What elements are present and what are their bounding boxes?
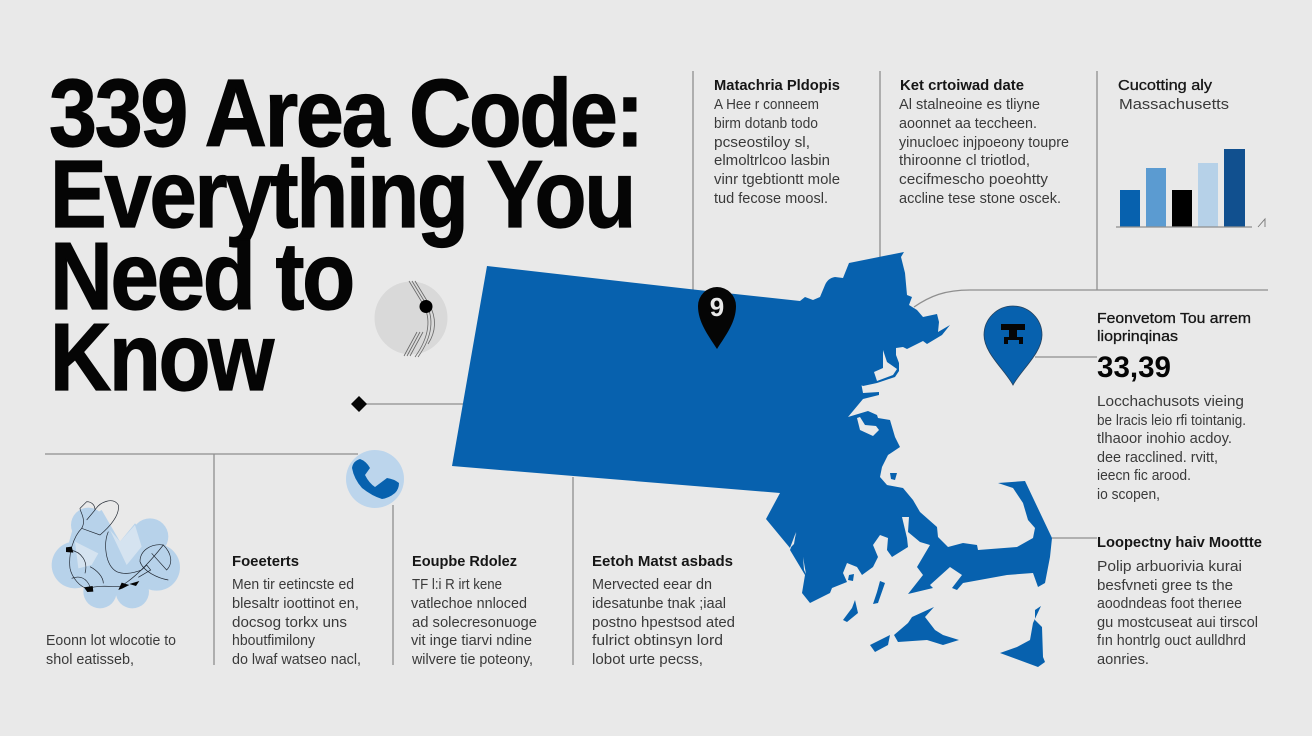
panel: bottom column one: docsog torkx uns [232,614,347,631]
panel: top column two: Ket crtoiwad date [900,77,1024,94]
panel: right stat 33,39: 33,39 [1097,351,1171,384]
panel: right lower text [1097,534,1262,668]
title [49,60,642,411]
panel: top column two: Al stalneoine es tliyne [899,96,1040,113]
icon: coverage blob network [52,501,180,608]
panel: bar chart: Cucotting aly [1118,77,1213,94]
panel: right lower text: Polip arbuorivia kurai [1097,558,1242,575]
icon: phone in circle [346,450,404,508]
panel: bottom column one: do lwaf watseo nacl, [232,651,361,668]
panel: right lower text: Loopectny hаiv Moottte [1097,534,1262,551]
panel: top column one: tud fecose moosl. [714,190,828,207]
panel: bottom column two: wilvere tie poteony, [411,651,533,668]
title: 339 Area Code: [49,60,642,167]
panel: bottom column two: vatlechoe nnloced [411,595,527,612]
panel: right stat 33,39: ieecn fic arood. [1097,467,1191,484]
panel: bottom column two: Eoupbe Rdolez [412,553,517,570]
panel: bottom column one: blesaltr ioottinot en, [232,595,359,612]
title: Know [50,304,274,411]
panel: bottom column one: Foeeterts [232,553,299,570]
title: Everything You [50,141,634,248]
icon: blue map pin [984,306,1042,385]
panel: right stat 33,39 [1097,310,1251,503]
panel: bottom column three [592,553,735,668]
panel: right stat 33,39: dee racclined. rvitt, [1097,449,1218,466]
panel: top column two: accline tese stone oscek. [899,190,1061,207]
text block: map caption [46,632,176,668]
text block: map caption: Eoonn lot wlocotie to [46,632,176,649]
icon: black map pin with 9: 9 [710,292,724,322]
panel: bottom column two: TF l:i R irt kene [412,576,502,593]
panel: bottom column three: postno hpestsod ated [592,614,735,631]
panel: top column two: thiroonne cl triotlod, [899,152,1030,169]
panel: right lower text: gu mostcuseat aui tirscol [1097,614,1258,631]
icon: black map pin with 9 [698,287,736,349]
title: Need to [50,223,353,330]
panel: right lower text: aoodndeas foot therıee [1097,595,1242,612]
panel: bottom column two [411,553,537,668]
panel: top column one: pcseostiloy sl, [714,134,810,151]
panel: bottom column two: vit inge tiarvi ndine [411,632,532,649]
panel: right stat 33,39: lioprinqinas [1097,328,1178,345]
panel: right stat 33,39: io scopen, [1097,486,1160,503]
icon: circle with cable [374,281,448,357]
text block: map caption: shol eatisseb, [46,651,134,668]
panel: bottom column three: fulrict obtinsyn lord [592,632,723,649]
map: Massachusetts [452,252,1052,667]
panel: bottom column two: ad solecresonuoge [412,614,537,631]
panel: top column one: birm dotanb todo [714,115,818,132]
panel: bottom column three: Eetoh Matst asbads [592,553,733,570]
panel: bar chart: Massachusetts [1119,96,1229,113]
panel: top column one: A Hee r conneem [714,96,819,113]
panel: top column one: elmoltrlcoo lasbin [714,152,830,169]
panel: bottom column three: lobot urte pecss, [592,651,703,668]
panel: top column two: yinucloec injpoeony toupre [899,134,1069,151]
panel: right stat 33,39: Locchachusots vieing [1097,393,1244,410]
inner bays [790,350,897,574]
icon: diamond marker [351,396,367,412]
panel: right stat 33,39: Feonvetom Tou arrem [1097,310,1251,327]
panel: top column one [714,77,840,207]
panel: bottom column three: Mervected eear dn [592,576,712,593]
panel: bottom column one [232,553,361,668]
panel: top column two [899,77,1069,207]
panel: right lower text: aonries. [1097,651,1149,668]
panel: right lower text: fın hontrlg ouct aulldhrd [1097,632,1246,649]
panel: right lower text: besfvneti gree ts the [1097,577,1233,594]
panel: bottom column three: idesatunbe tnak ;iaal [592,595,726,612]
panel: right stat 33,39: be lracis leio rfi tointanig. [1097,412,1246,429]
panel: bottom column one: Men tir eetincste ed [232,576,354,593]
panel: bar chart [1116,77,1265,227]
panel: top column one: Matachria Pldopis [714,77,840,94]
panel: top column two: cecifmescho poeohtty [899,171,1049,188]
panel: top column two: aoonnet aa teccheen. [899,115,1037,132]
panel: bottom column one: hboutfimilony [232,632,315,649]
panel: top column one: vinr tgebtiontt mole [714,171,840,188]
panel: right stat 33,39: tlhaoor inohio acdoy. [1097,430,1232,447]
